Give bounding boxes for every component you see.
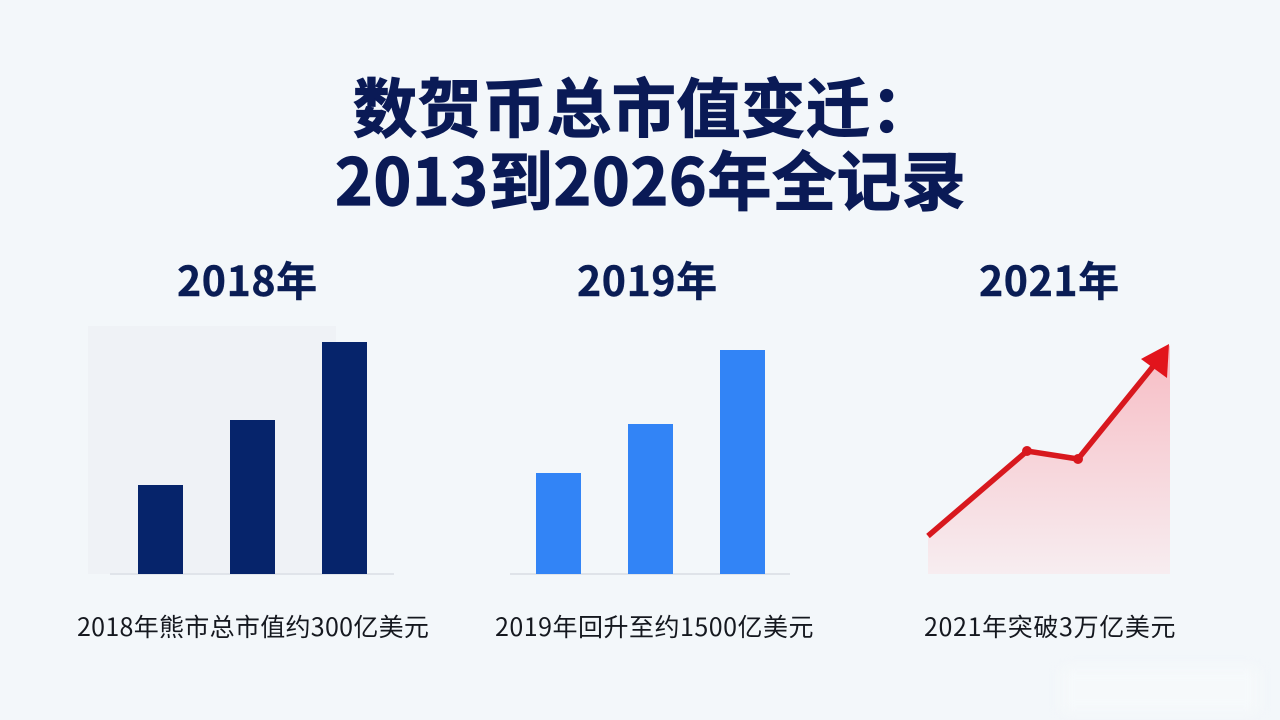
- bar chart: 2018: [88, 326, 394, 575]
- caption: 2021: 2021年突破3万亿美元: [924, 608, 1176, 644]
- title: 2013到2026年全记录: [335, 132, 966, 224]
- bar chart: 2019: [510, 350, 790, 575]
- caption: 2019: 2019年回升至约1500亿美元: [495, 608, 814, 644]
- icon: arrow head: [1141, 344, 1169, 378]
- heading: 2018: 2018年: [177, 248, 318, 308]
- watermark smudge: [1062, 668, 1258, 712]
- title: [335, 59, 966, 224]
- line chart: 2021: [928, 344, 1170, 574]
- title: 数贺币总市值变迁：: [353, 59, 935, 151]
- heading: 2021: 2021年: [979, 248, 1120, 308]
- heading: 2019: 2019年: [577, 248, 718, 308]
- caption: 2018: 2018年熊市总市值约300亿美元: [77, 608, 429, 644]
